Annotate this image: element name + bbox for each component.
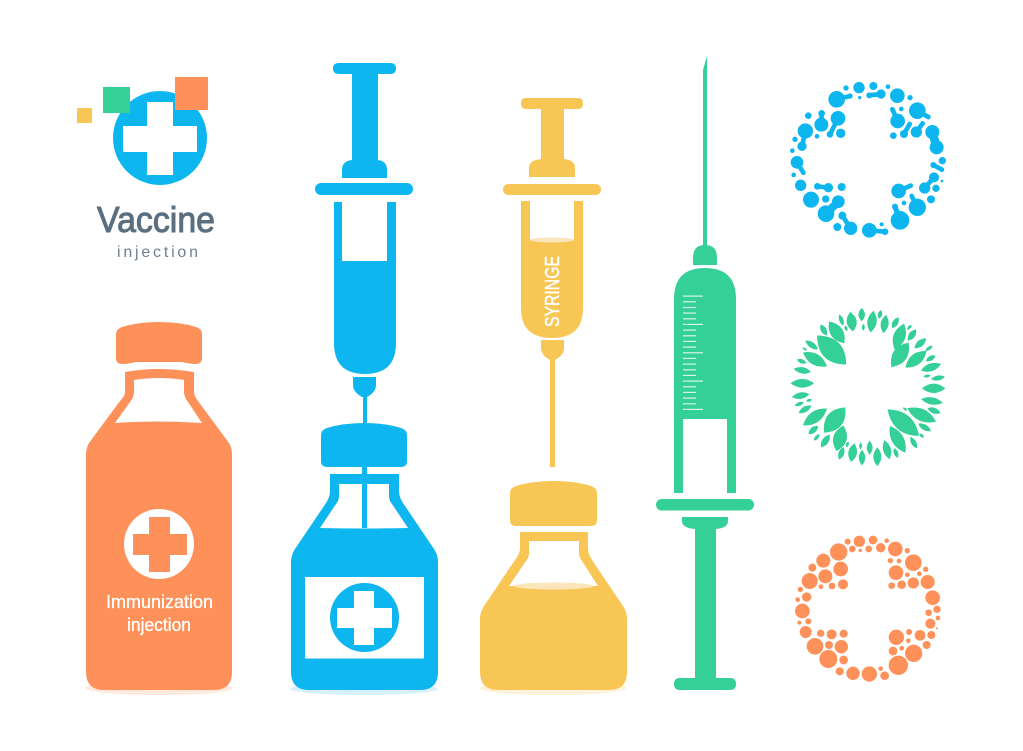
needle hub [541,340,564,360]
bottle shadow [479,681,627,695]
bottle shadow [85,681,233,695]
bottle shadow [290,683,438,695]
barrel with liquid [334,202,396,374]
icon: yellow square [77,108,92,123]
bottle cap [321,423,407,467]
liquid surface [530,238,574,242]
needle [363,396,367,426]
blue bottle [290,423,438,695]
label text: Immunization: Immunization [106,592,213,612]
heading: Vaccine: Vaccine [97,199,215,240]
liquid surface [514,582,594,590]
graduation marks [683,296,703,410]
badge: green leaf cross [791,309,945,466]
barrel with liquid [674,268,736,493]
plunger [521,98,583,177]
needle [703,56,707,246]
yellow syringe [503,98,601,467]
bottle body [86,369,232,690]
flange [656,499,754,510]
needle inside bottle [362,467,367,528]
white label [305,577,424,658]
bottle body [291,474,438,690]
bottle cap [116,322,202,364]
label text: injection: injection [127,615,191,635]
orange bottle [85,322,233,695]
plunger [333,63,396,178]
icon: green square [103,87,130,113]
blue syringe [315,63,413,426]
yellow bottle [479,481,627,695]
icon: medical cross in circle [113,91,207,185]
plunger [674,517,736,690]
barrel with liquid [521,201,583,338]
needle hub [353,377,376,397]
badge: orange dot cross [795,536,941,682]
icon: orange square [175,77,208,110]
label icon: cross in circle [330,583,399,652]
bottle body [480,532,627,690]
needle hub [693,245,717,265]
bubbles [790,82,946,238]
label icon: cross in circle [124,509,194,579]
flange [315,183,413,195]
bottle window [320,484,408,528]
green syringe [656,56,754,690]
label: SYRINGE: SYRINGE [542,256,564,327]
bubble connectors [797,94,942,232]
subheading: injection: injection [117,244,198,261]
flange [503,184,601,195]
badge: blue bubble cross [790,82,946,238]
bottle window [115,378,202,423]
bottle window [509,541,598,586]
bottle cap [510,481,597,526]
needle [550,359,555,467]
logo: vaccine injection [77,77,215,261]
